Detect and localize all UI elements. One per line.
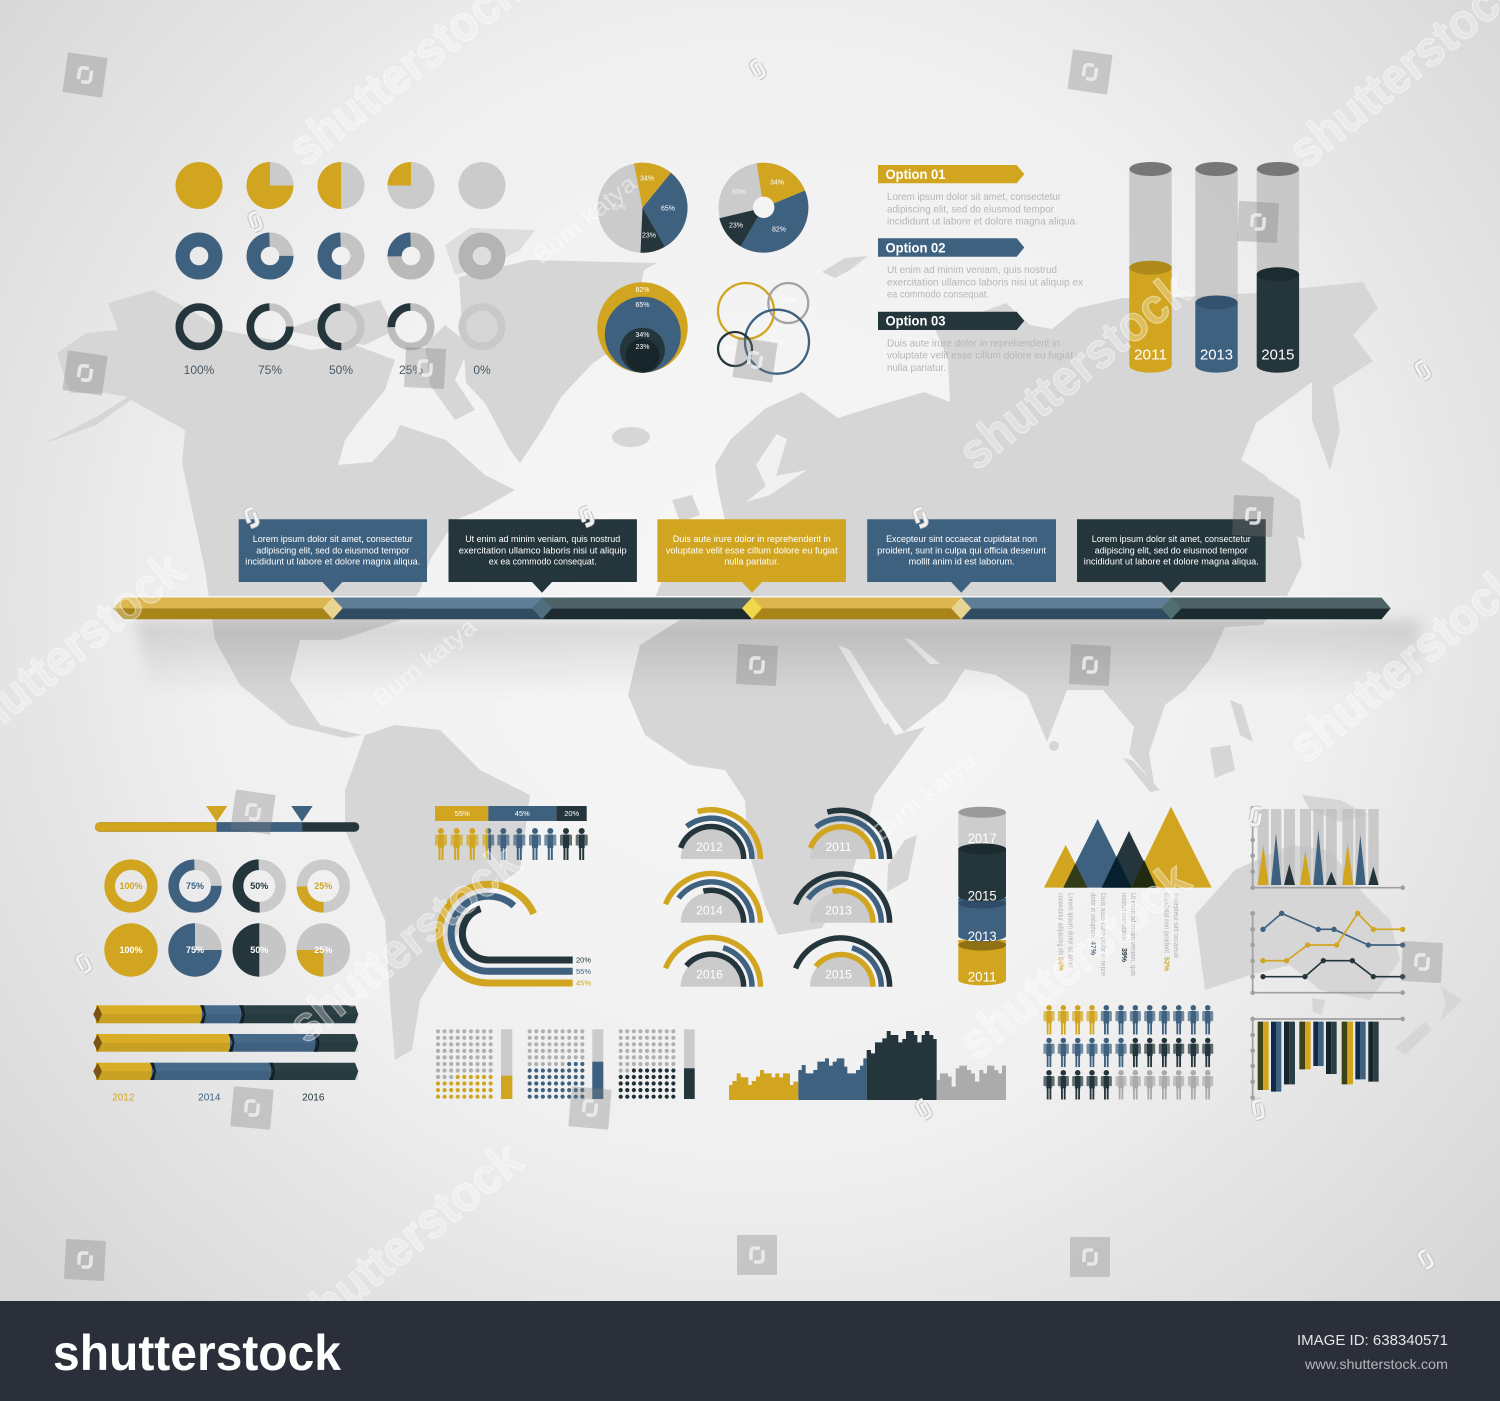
panel: dot matrix gauges (438, 1029, 695, 1099)
option 01 (878, 165, 1078, 228)
callout 5: Lorem ipsum dolor sit amet, consectetur (1092, 534, 1251, 545)
option 03: Duis aute irure dolor in reprehenderit in (887, 338, 1060, 349)
timeline arrow bar (113, 596, 1391, 619)
chart: overlapping rings: 82% (770, 339, 784, 346)
gauge 2012 (681, 810, 760, 859)
chart: donut pie: 23% (729, 222, 743, 230)
dot grid gold (438, 1029, 512, 1099)
callout 2: exercitation ullamco laboris nisi ut aliquip (459, 545, 627, 556)
callout 4: proident, sunt in culpa qui officia deserunt (877, 545, 1046, 556)
callout 1 (239, 519, 427, 593)
callout 2: ex ea commodo consequat. (489, 557, 597, 568)
callout 3: voluptate velit esse cillum dolore eu fugiat (666, 545, 838, 556)
callout 2 (448, 519, 637, 593)
option 01: Lorem ipsum dolor sit amet, consectetur (887, 192, 1062, 203)
row: thick donuts (183, 240, 498, 272)
timeline drop shadow (135, 620, 1420, 695)
chart: stacked cylinder: 2013 (968, 928, 997, 944)
gauge 2011 (810, 810, 890, 859)
row: thin rings (179, 307, 502, 346)
people row (435, 828, 588, 860)
slider bar with markers (95, 806, 359, 832)
option 01: adipiscing elit, sed do eiusmod tempor (887, 204, 1055, 215)
callout 4 (867, 519, 1056, 593)
cylinder 2015: 2015 (1261, 346, 1294, 364)
chart: people pictogram grid (1044, 1005, 1213, 1099)
gauge 2013 (796, 874, 890, 923)
shutterstock text marks: shutterstock (278, 834, 531, 1054)
solid pie row: 25% (314, 945, 332, 955)
rotated triangle captions: Excepteur sint occaecat (1172, 893, 1179, 958)
option 02: Ut enim ad minim veniam, quis nostrud (887, 265, 1057, 276)
rotated triangle captions: nostrud exercitation (1120, 893, 1127, 941)
bar chart year labels: 2012 (112, 1092, 135, 1104)
gauge 2015 (796, 938, 890, 987)
option 01: incididunt ut labore et dolore magna aliqua. (887, 217, 1078, 228)
world map (41, 228, 1462, 1060)
chart: cylinder columns (1129, 162, 1299, 373)
line series gold (1260, 911, 1405, 963)
footer image id: IMAGE ID: 638340571 (1297, 1332, 1448, 1349)
chart: spike columns (1250, 806, 1405, 890)
callout 3: nulla pariatur. (724, 557, 779, 568)
option 03: voluptate velit esse cillum dolore eu fugiat (887, 351, 1073, 362)
rotated triangle captions: dolor in voluptate (1089, 893, 1096, 938)
shutterstock text marks: shutterstock (280, 1131, 533, 1351)
dot grid blue (530, 1029, 603, 1099)
option 03: nulla pariatur. (887, 363, 946, 374)
gauge 2012: 2012 (696, 840, 723, 854)
cylinder 2015 (1257, 162, 1299, 373)
callout 5 (1077, 519, 1266, 593)
bar row 2 (93, 1034, 358, 1052)
ring gauge row: 100% (119, 881, 143, 891)
callout 2: Ut enim ad minim veniam, quis nostrud (465, 534, 620, 545)
rotated triangle captions: 52% (1162, 957, 1170, 972)
percent labels: 0% (473, 363, 491, 377)
panel: pie and donut percentage matrix (176, 162, 506, 377)
chart: overlapping triangles (1044, 807, 1212, 888)
chart: line graph (1250, 911, 1405, 995)
percent labels: 75% (258, 363, 282, 377)
contributor text marks (368, 170, 982, 847)
pictogram row 3 (1044, 1070, 1213, 1099)
shutterstock text marks: shutterstock (948, 261, 1201, 481)
row: solid pies (176, 162, 506, 209)
chart: segmented pie (598, 163, 688, 253)
option 02 (878, 238, 1083, 301)
chart: nested circles: 34% (635, 332, 650, 339)
percent labels: 50% (329, 363, 353, 377)
bar chart year labels: 2014 (198, 1092, 221, 1104)
chart: overlapping rings: 23% (723, 346, 737, 353)
cylinder 2011: 2011 (1134, 346, 1167, 364)
callout 1: Lorem ipsum dolor sit amet, consectetur (253, 534, 413, 545)
rotated triangle captions: Ut enim ad minim veniam, quis (1129, 893, 1136, 976)
gauge 2011: 2011 (826, 840, 852, 854)
rotated triangle captions (1056, 893, 1179, 976)
chart: stepped area skyline (729, 1031, 1006, 1100)
callout 1: incididunt ut labore et dolore magna aliqua. (245, 557, 420, 568)
chart: segmented pie: 82% (612, 204, 626, 212)
gauge 2016 (666, 938, 760, 987)
chart: curved bar racetrack: 20% (576, 956, 591, 964)
rotated triangle captions: consectetur adipiscing elit (1056, 893, 1064, 955)
solid pie row: 75% (186, 945, 204, 955)
percent labels: 25% (399, 363, 423, 377)
option 02: Option 02 (886, 239, 946, 255)
ring gauge row: 75% (186, 881, 204, 891)
bar chart year labels: 2016 (302, 1092, 325, 1104)
contributor text marks: Bum katya (368, 613, 482, 713)
rotated triangle captions: 47% (1089, 941, 1096, 956)
chart: donut pie: 65% (732, 189, 746, 196)
chart: segmented pie: 23% (642, 232, 656, 240)
bar row 3 (93, 1063, 358, 1080)
panel: arc gauges by year (666, 810, 890, 987)
chart: curved bar racetrack: 45% (576, 978, 591, 988)
chart: curved bar racetrack: 55% (576, 967, 591, 976)
bar row 1 (93, 1005, 358, 1023)
panel: ring gauges with percentages (104, 865, 350, 977)
callout 1: adipiscing elit, sed do eiusmod tempor (256, 545, 409, 556)
chart: donut pie: 82% (772, 226, 786, 234)
cylinder 2013: 2013 (1200, 346, 1233, 364)
rotated triangle captions: Duis aute irure dolor in repre (1099, 893, 1106, 976)
chart: stacked cylinder: 2015 (968, 888, 997, 904)
callout 5: adipiscing elit, sed do eiusmod tempor (1095, 545, 1248, 556)
option 03 (878, 312, 1073, 374)
ring gauge row: 50% (250, 881, 268, 891)
chart: stacked hexagonal bars (93, 1005, 358, 1104)
gauge 2014: 2014 (696, 904, 723, 918)
chart: nested circles (597, 282, 688, 373)
ring gauge row: 25% (314, 881, 332, 891)
footer site url: www.shutterstock.com (1304, 1356, 1448, 1372)
callout 4: mollit anim id est laborum. (909, 557, 1015, 568)
dot grid dark (621, 1029, 695, 1099)
gauge 2013: 2013 (825, 904, 852, 918)
option 03: Option 03 (886, 313, 946, 329)
solid pie row: 50% (250, 945, 268, 955)
chart: people share bar: 55% (455, 809, 470, 818)
line series dark (1260, 958, 1405, 979)
chart: stacked cylinder: 2011 (968, 968, 997, 984)
chart: nested circles: 82% (635, 287, 650, 294)
timeline markers (323, 598, 1181, 619)
percent labels (184, 363, 491, 377)
chart: nested circles: 23% (635, 344, 650, 351)
chart: people share bar: 20% (564, 809, 580, 818)
bar chart year labels (112, 1092, 325, 1104)
map inland seas (746, 434, 940, 725)
callout 3: Duis aute irure dolor in reprehenderit in (673, 534, 831, 545)
chart: segmented pie: 34% (640, 176, 654, 182)
panel: timeline callouts (239, 519, 1266, 593)
chart: donut pie: 34% (770, 180, 784, 186)
pictogram row 2 (1044, 1038, 1213, 1067)
chart: hanging bars (1250, 1017, 1405, 1100)
chart: people share bar (435, 806, 588, 860)
panel: option list (878, 165, 1083, 374)
chart: curved bar racetrack (439, 884, 591, 988)
callout 5: incididunt ut labore et dolore magna aliqua. (1084, 557, 1259, 568)
footer logo: shutterstock (53, 1325, 341, 1381)
contributor text marks: Bum katya (868, 747, 982, 847)
option 02: ea commodo consequat. (887, 290, 989, 301)
chart: donut pie (718, 163, 808, 253)
solid pie row (104, 923, 350, 977)
small outline logo marks (76, 60, 1433, 1269)
rotated triangle captions: Lorem ipsum dolor sit amet (1066, 893, 1074, 968)
cylinder 2013 (1195, 162, 1238, 373)
callout 3 (657, 519, 846, 593)
chart: segmented pie: 65% (661, 206, 675, 212)
option 01: Option 01 (886, 166, 946, 182)
callout 4: Excepteur sint occaecat cupidatat non (886, 534, 1037, 545)
rotated triangle captions: cupidatat non proident (1162, 893, 1170, 953)
solid pie row: 100% (119, 945, 143, 955)
option 02: exercitation ullamco laboris nisi ut aliquip ex (887, 277, 1083, 288)
chart: nested circles: 65% (635, 302, 650, 309)
ring gauge row (110, 865, 345, 907)
rotated triangle captions: 39% (1120, 948, 1127, 963)
contributor text marks: Bum katya (528, 170, 642, 270)
chart: stacked cylinder: 2017 (968, 830, 997, 846)
gauge 2016: 2016 (696, 968, 723, 982)
line series blue (1260, 911, 1405, 948)
chart: overlapping rings: 34% (782, 298, 796, 304)
gauge 2015: 2015 (825, 968, 852, 982)
pictogram row 1 (1044, 1005, 1213, 1034)
percent labels: 100% (184, 363, 215, 377)
gauge 2014 (666, 874, 760, 923)
chart: overlapping rings (718, 283, 809, 374)
chart: people share bar: 45% (515, 809, 530, 818)
shutterstock text marks: shutterstock (948, 851, 1201, 1071)
footer bar (0, 1301, 1500, 1401)
chart: stacked cylinder (958, 807, 1006, 985)
cylinder 2011 (1129, 162, 1172, 373)
rotated triangle captions: 54% (1056, 957, 1064, 972)
